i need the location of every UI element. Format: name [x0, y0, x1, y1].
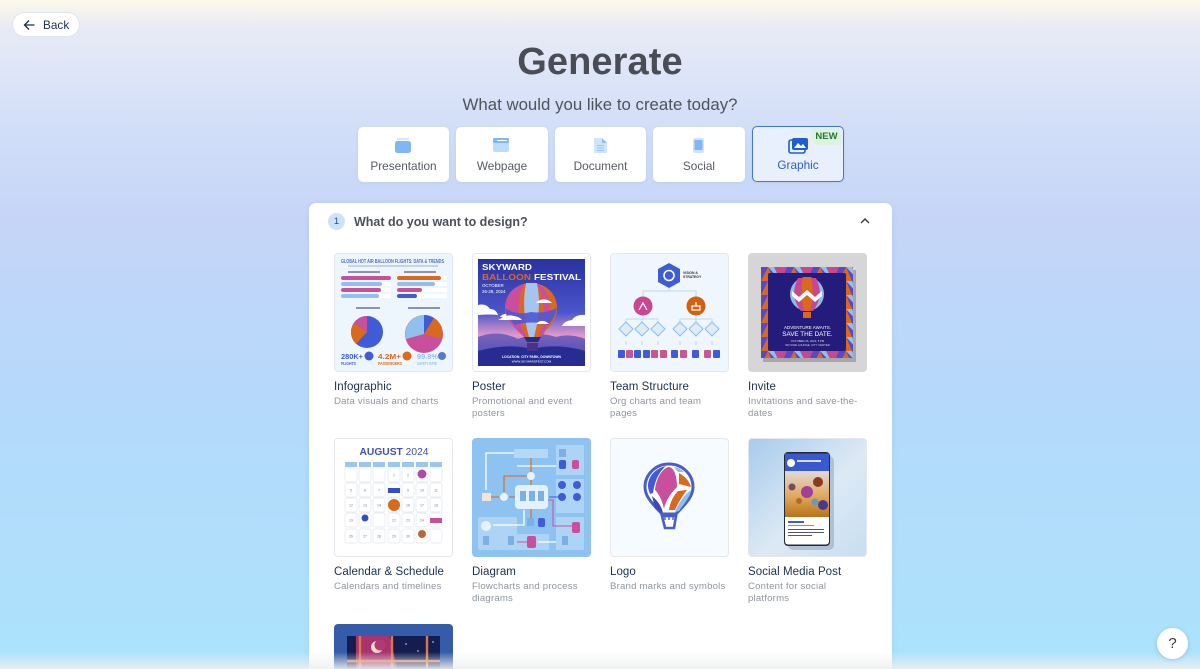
panel heading: What do you want to design?	[354, 215, 528, 229]
back button: Back	[43, 18, 69, 32]
description: logo: Brand marks and symbols	[610, 581, 726, 592]
thumbnail: infographic: 4.2M+	[378, 352, 402, 361]
thumbnail: calendar: 2	[407, 474, 409, 478]
thumbnail: diagram	[472, 438, 591, 557]
thumbnail: calendar: AUGUST 2024	[360, 447, 429, 458]
label: calendar: Calendar & Schedule	[334, 566, 444, 578]
thumbnail: calendar: 11	[434, 488, 438, 492]
label: infographic: Infographic	[334, 381, 392, 393]
description: invite	[748, 396, 858, 419]
thumbnail: partial night window	[334, 624, 453, 669]
thumbnail: calendar: 7	[378, 488, 380, 492]
tab: graphic selected: Graphic	[777, 158, 819, 172]
description: social media post	[748, 581, 826, 604]
tab: webpage: Webpage	[477, 159, 527, 173]
description: invite: Invitations and save-the-	[748, 396, 858, 407]
tab: graphic selected	[752, 126, 844, 182]
description: infographic: Data visuals and charts	[334, 396, 438, 407]
thumbnail: calendar: 12	[349, 504, 353, 508]
description: calendar: Calendars and timelines	[334, 581, 442, 592]
description: poster: Promotional and event	[472, 396, 572, 407]
tab: graphic selected: NEW	[815, 131, 838, 142]
thumbnail: infographic: SAFETY RATE	[417, 361, 437, 366]
thumbnail: calendar: 27	[363, 534, 367, 538]
subtitle: What would you like to create today?	[463, 95, 737, 114]
back button	[12, 12, 80, 37]
thumbnail: calendar: 6	[364, 488, 366, 492]
thumbnail: poster: BALLOON	[482, 272, 531, 282]
tab: social	[653, 127, 745, 182]
thumbnail: calendar: 13	[363, 504, 367, 508]
description: diagram	[472, 581, 578, 604]
thumbnail: infographic	[334, 253, 453, 372]
thumbnail: infographic: FLIGHTS	[341, 361, 356, 366]
thumbnail: infographic: 99.8%	[417, 352, 438, 361]
description: team structure: pages	[610, 408, 637, 419]
label: team structure: Team Structure	[610, 381, 689, 393]
bottom fade	[0, 652, 1200, 669]
thumbnail: calendar: 22	[392, 518, 396, 522]
thumbnail: invite: OCTOBER 26, 2024, 5 PM	[791, 339, 825, 343]
chevron	[860, 218, 870, 224]
description: team structure: Org charts and team	[610, 396, 701, 407]
thumbnail: calendar: 18	[434, 504, 438, 508]
label: invite: Invite	[748, 381, 776, 393]
thumbnail: calendar: 10	[420, 488, 424, 492]
title: Generate	[517, 41, 683, 83]
thumbnail: team structure: STRATEGY	[683, 275, 702, 279]
help button: ?	[1168, 635, 1177, 652]
thumbnail: logo	[610, 438, 729, 557]
thumbnail: calendar: 9	[407, 488, 409, 492]
tab: webpage	[456, 127, 548, 182]
description: diagram: Flowcharts and process	[472, 581, 578, 592]
thumbnail: calendar: 14	[377, 504, 381, 508]
step badge	[328, 213, 345, 230]
thumbnail: calendar: 29	[392, 534, 396, 538]
description: invite: dates	[748, 408, 772, 419]
help button	[1157, 628, 1188, 659]
main panel	[309, 203, 892, 669]
tab: social: Social	[683, 159, 715, 173]
tab: presentation: Presentation	[370, 159, 437, 173]
thumbnail: calendar: 28	[377, 534, 381, 538]
thumbnail: calendar	[334, 438, 453, 557]
thumbnail: poster	[472, 253, 591, 372]
thumbnail: team structure: VISION &	[683, 271, 698, 275]
thumbnail: team structure	[610, 253, 729, 372]
thumbnail: calendar: 26	[349, 534, 353, 538]
label: diagram: Diagram	[472, 566, 516, 578]
step badge: 1	[334, 216, 339, 227]
tab: presentation	[358, 127, 449, 182]
description: diagram: diagrams	[472, 593, 513, 604]
thumbnail: calendar: 5	[350, 488, 352, 492]
thumbnail: poster: FESTIVAL	[534, 272, 581, 282]
thumbnail: invite: SAVE THE DATE.	[782, 331, 833, 338]
description: social media post: Content for social	[748, 581, 826, 592]
description: poster	[472, 396, 572, 419]
thumbnail: poster: LOCATION: CITY PARK, DOWNTOWN	[502, 355, 561, 359]
description: team structure	[610, 396, 701, 419]
thumbnail: calendar: 1	[393, 474, 395, 478]
thumbnail: poster: OCTOBER	[482, 283, 504, 288]
tab: document	[555, 127, 646, 182]
thumbnail: calendar: 17	[420, 504, 424, 508]
description: social media post: platforms	[748, 593, 789, 604]
label: logo: Logo	[610, 566, 636, 578]
thumbnail: poster: 26-28, 2024	[482, 289, 506, 294]
thumbnail: calendar: 30	[406, 534, 410, 538]
thumbnail: calendar: 16	[406, 504, 410, 508]
thumbnail: infographic: 280K+	[341, 352, 364, 361]
thumbnail: calendar: 19	[349, 518, 353, 522]
label: social media post: Social Media Post	[748, 566, 841, 578]
thumbnail: infographic: PASSENGERS	[378, 361, 402, 366]
thumbnail: calendar: 23	[406, 518, 410, 522]
thumbnail: poster: WWW.SKYWARDFEST.COM	[512, 360, 552, 364]
thumbnail: calendar: 24	[420, 518, 424, 522]
thumbnail: poster: SKYWARD	[482, 262, 532, 272]
thumbnail: invite	[748, 253, 867, 372]
thumbnail: invite: ADVENTURE AWAITS.	[784, 325, 831, 330]
thumbnail: social media post	[748, 438, 867, 557]
thumbnail: invite: SKYLINE LOUNGE, CITY CENTER	[785, 343, 830, 347]
label: poster: Poster	[472, 381, 506, 393]
tab: document: Document	[574, 159, 627, 173]
description: poster: posters	[472, 408, 505, 419]
